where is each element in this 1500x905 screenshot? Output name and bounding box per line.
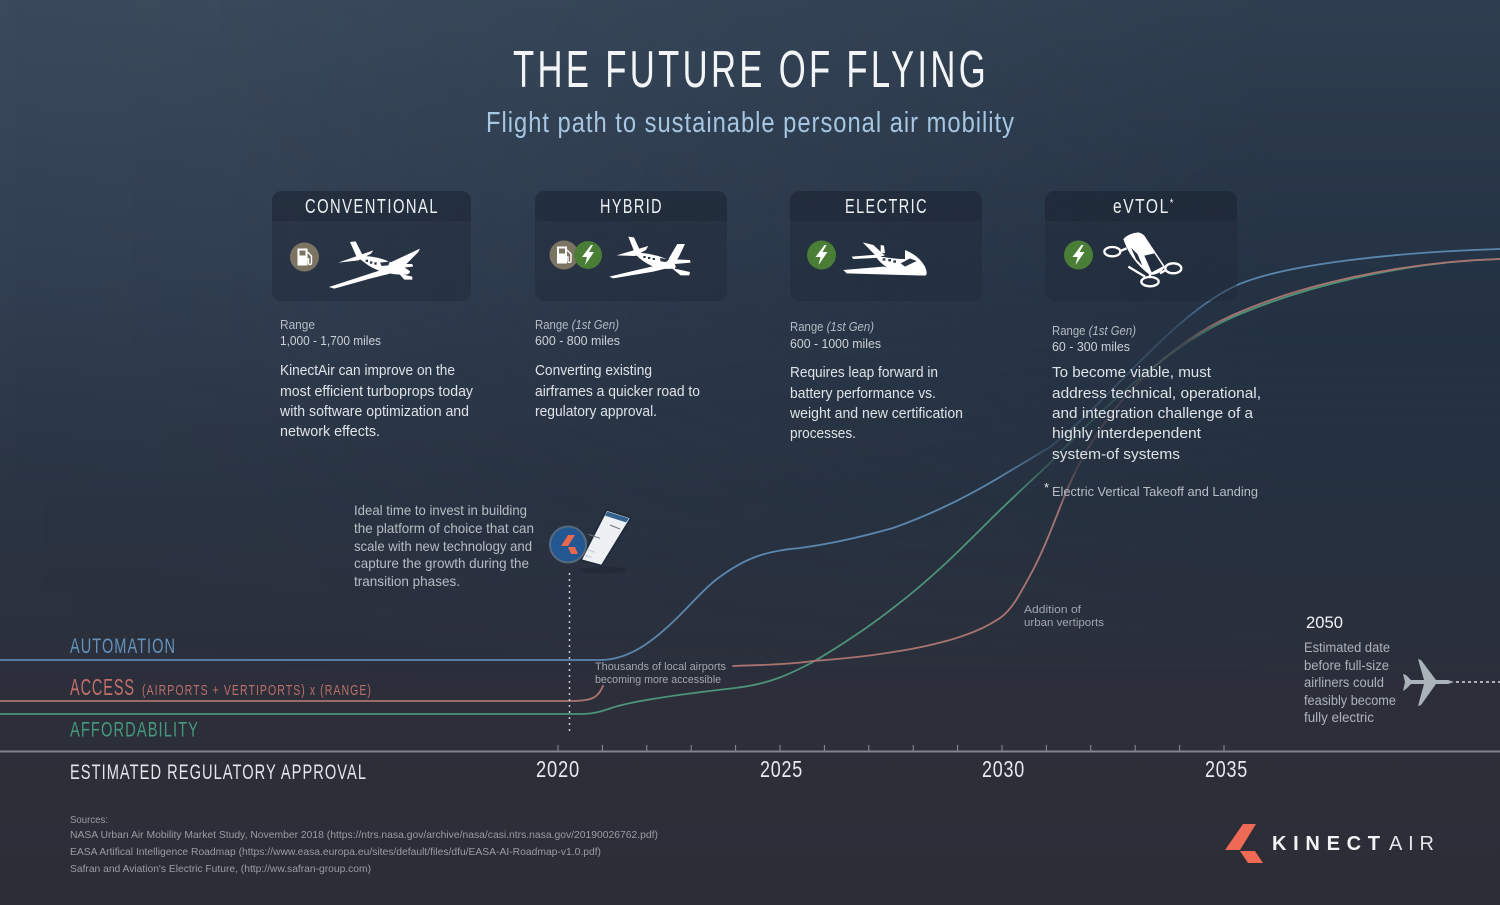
description: KinectAir can improve on the xyxy=(280,362,455,379)
callout: invest in platform: capture the growth during the xyxy=(354,555,529,571)
icon: airliner xyxy=(1403,659,1454,706)
callout: invest in platform: transition phases. xyxy=(354,573,460,589)
footnote: Electric Vertical Takeoff and Landing xyxy=(1052,484,1258,499)
panel: eVTOL xyxy=(1044,191,1261,499)
sources: Safran and Aviation's Electric Future, (http://ww.safran-group.com) xyxy=(70,863,371,875)
description: highly interdependent xyxy=(1052,425,1202,442)
callout: 2050: fully electric xyxy=(1304,710,1374,725)
description: To become viable, must xyxy=(1052,364,1212,381)
icon: eVTOL aircraft xyxy=(1104,232,1181,286)
description: airframes a quicker road to xyxy=(535,383,700,400)
range label: Range (1st Gen) xyxy=(790,320,874,334)
heading: eVTOL: eVTOL xyxy=(1113,196,1186,218)
heading: electric: ELECTRIC xyxy=(845,196,928,218)
description xyxy=(1052,364,1261,463)
range label: Range (1st Gen) xyxy=(535,318,619,332)
annotation: local airports: becoming more accessible xyxy=(595,674,721,686)
icon: fuel pump xyxy=(290,242,319,272)
description xyxy=(789,364,963,442)
callout: invest in platform xyxy=(354,502,534,589)
annotation: urban vertiports xyxy=(1024,604,1105,629)
icon: electric plane xyxy=(843,242,927,276)
legend: access: (AIRPORTS + VERTIPORTS) x (RANGE) xyxy=(142,682,372,699)
annotation: urban vertiports: urban vertiports xyxy=(1024,617,1105,629)
heading: hybrid: HYBRID xyxy=(600,196,663,218)
description: with software optimization and xyxy=(279,403,469,420)
logo: KinectAir: KINECT xyxy=(1272,833,1380,855)
callout: invest in platform: the platform of choice that can xyxy=(354,520,534,536)
title: THE FUTURE OF FLYING xyxy=(513,41,989,99)
callout: invest in platform: Ideal time to invest in building xyxy=(354,502,527,518)
logo: KinectAir: AIR xyxy=(1389,833,1434,855)
callout: 2050: feasibly become xyxy=(1304,693,1396,708)
icon: electric bolt xyxy=(1064,240,1093,270)
timeline axis: 2020 xyxy=(536,756,580,782)
legend: access: ACCESS xyxy=(70,674,135,700)
legend: access xyxy=(70,674,372,700)
panel: hybrid xyxy=(535,191,727,420)
icon: electric bolt xyxy=(807,240,836,270)
logo: KinectAir xyxy=(1225,824,1434,863)
annotation: local airports xyxy=(595,661,726,686)
range value: 600 - 1000 miles xyxy=(790,336,881,351)
dashed flight path xyxy=(1456,681,1500,683)
description: network effects. xyxy=(280,423,380,440)
annotation: local airports: Thousands of local airports xyxy=(595,661,726,673)
timeline axis: 2030 xyxy=(982,756,1025,782)
footnote: * xyxy=(1044,480,1049,495)
callout: 2050: airliners could xyxy=(1304,675,1384,690)
callout: 2050: 2050 xyxy=(1306,613,1343,632)
description: weight and new certification xyxy=(789,405,963,422)
callout: 2050: Estimated date xyxy=(1304,640,1390,655)
description xyxy=(535,362,700,420)
legend: automation: AUTOMATION xyxy=(70,635,176,658)
legend: affordability: AFFORDABILITY xyxy=(70,718,199,742)
description: battery performance vs. xyxy=(790,385,936,402)
range value: 1,000 - 1,700 miles xyxy=(280,333,381,348)
icon: KinectAir badge xyxy=(550,526,586,562)
annotation: urban vertiports: Addition of xyxy=(1024,604,1082,616)
sources: NASA Urban Air Mobility Market Study, November 2018 (https://ntrs.nasa.gov/archive/nasa/casi.ntrs.nasa.gov/20190026762.pdf) xyxy=(70,829,658,841)
icon: conventional plane xyxy=(329,241,420,289)
description: address technical, operational, xyxy=(1052,385,1261,402)
sources: EASA Artifical Intelligence Roadmap (https://www.easa.europa.eu/sites/default/files/dfu/EASA-AI-Roadmap-v1.0.pdf) xyxy=(70,846,601,858)
range label: Range xyxy=(280,318,315,332)
panel: conventional xyxy=(272,191,473,440)
callout: invest in platform: scale with new technology and xyxy=(354,538,532,554)
timeline axis: 2025 xyxy=(760,756,803,782)
description: system-of systems xyxy=(1052,446,1180,463)
description: processes. xyxy=(790,425,856,442)
heading: conventional: CONVENTIONAL xyxy=(305,196,439,218)
icon: fuel pump xyxy=(550,240,578,270)
axis label: ESTIMATED REGULATORY APPROVAL xyxy=(70,761,367,784)
panel: electric xyxy=(789,191,982,442)
sources xyxy=(70,814,658,875)
description: Requires leap forward in xyxy=(790,364,938,381)
subtitle: Flight path to sustainable personal air mobility xyxy=(486,107,1015,139)
icon: phone xyxy=(580,510,631,573)
icon: hybrid plane xyxy=(609,237,691,278)
sources: Sources: xyxy=(70,814,108,826)
heading: eVTOL: * xyxy=(1170,196,1175,210)
description: regulatory approval. xyxy=(535,403,657,420)
range value: 600 - 800 miles xyxy=(535,333,620,348)
description: and integration challenge of a xyxy=(1052,405,1254,422)
timeline axis: 2035 xyxy=(1205,756,1248,782)
timeline axis xyxy=(0,745,1500,782)
description xyxy=(279,362,473,440)
range value: 60 - 300 miles xyxy=(1052,339,1130,354)
description: Converting existing xyxy=(535,362,652,379)
callout: 2050: before full-size xyxy=(1304,658,1389,673)
chart: adoption curves xyxy=(0,249,1500,720)
range label: Range (1st Gen) xyxy=(1052,324,1136,338)
description: most efficient turboprops today xyxy=(280,383,473,400)
icon: electric bolt xyxy=(574,241,602,269)
callout: 2050 xyxy=(1304,613,1396,725)
dotted marker line xyxy=(568,573,570,733)
